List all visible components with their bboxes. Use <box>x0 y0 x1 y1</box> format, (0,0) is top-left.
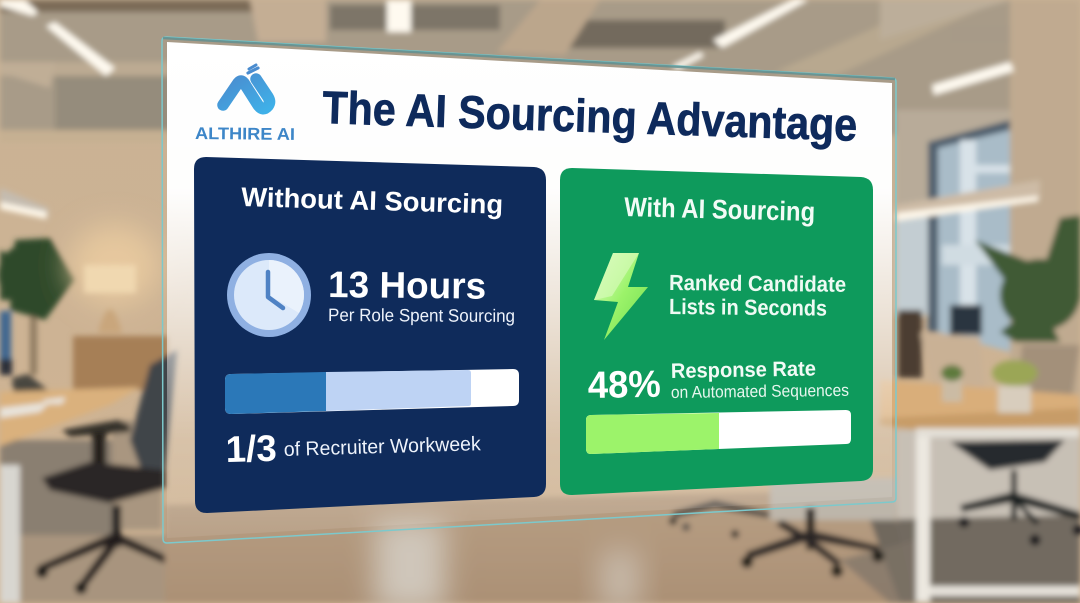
left pendant <box>0 188 48 218</box>
title: The AI Sourcing Advantage <box>322 81 858 151</box>
right plant <box>975 215 1080 342</box>
small background chair <box>672 500 770 518</box>
heading: Without AI Sourcing <box>241 182 504 220</box>
feature text <box>669 270 846 321</box>
panel: with AI sourcing <box>560 168 873 495</box>
right desk items <box>898 310 922 378</box>
heading: With AI Sourcing <box>624 192 816 227</box>
card background <box>194 157 546 513</box>
stat: 13 hours: 13 Hours <box>328 264 486 307</box>
table lamp <box>70 225 160 305</box>
floor <box>165 490 900 603</box>
left monitor <box>0 311 11 359</box>
left chair <box>130 350 177 480</box>
stat: 48 percent: 48% <box>587 364 661 407</box>
wall colours <box>1010 0 1080 395</box>
stat caption: Response Rate <box>671 357 816 383</box>
feature text: Ranked Candidate <box>669 270 846 297</box>
stat caption: on Automated Sequences <box>671 381 849 402</box>
right chair <box>950 440 1065 470</box>
stat: one third: 1/3 <box>225 428 277 470</box>
foreground chair base <box>806 508 815 550</box>
icon: lightning bolt <box>594 253 648 340</box>
logo wordmark: ALTHIRE AI <box>195 124 295 144</box>
logo: Althire AI <box>195 65 295 144</box>
icon: logo mark <box>223 65 270 109</box>
panel: without AI sourcing <box>194 157 546 513</box>
right window <box>928 120 1010 332</box>
ceiling <box>0 0 1080 135</box>
glass panel <box>162 37 896 543</box>
stat caption <box>671 357 849 402</box>
cabinet <box>73 336 168 390</box>
left plant <box>30 315 37 375</box>
pendant light right <box>896 180 1040 218</box>
feature text: Lists in Seconds <box>669 294 827 321</box>
ceiling lights <box>0 0 38 16</box>
under right desk <box>896 430 1080 520</box>
stat caption: of Recruiter Workweek <box>283 433 482 461</box>
rear wall behind panel <box>770 478 896 520</box>
icon: clock <box>227 253 311 337</box>
progress bar <box>225 369 519 414</box>
stat caption: Per Role Spent Sourcing <box>328 305 515 326</box>
card background <box>560 168 873 495</box>
under left desk <box>0 440 112 535</box>
left desk <box>0 387 140 446</box>
progress bar <box>586 410 851 454</box>
